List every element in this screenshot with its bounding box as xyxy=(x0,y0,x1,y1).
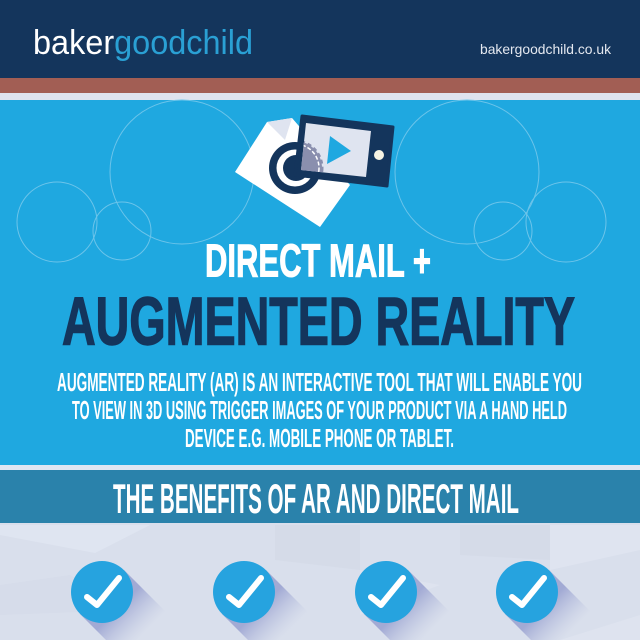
benefits panel xyxy=(0,523,640,640)
benefits band xyxy=(0,470,640,523)
heading line 1: DIRECT MAIL + xyxy=(205,234,431,286)
seal on screen xyxy=(301,141,324,172)
logo: bakergoodchild xyxy=(33,24,253,62)
header band xyxy=(0,0,640,78)
icon: check 2 xyxy=(213,561,316,640)
icon: check 3 xyxy=(355,561,458,640)
brown stripe xyxy=(0,78,640,93)
white divider xyxy=(0,465,640,470)
play triangle xyxy=(327,136,351,164)
icon: check 1 xyxy=(71,561,174,640)
icon: phone xyxy=(295,116,393,186)
website url: bakergoodchild.co.uk xyxy=(480,41,612,57)
background: blue panel xyxy=(0,100,640,466)
description text xyxy=(57,367,582,453)
light stripe xyxy=(0,93,640,100)
phone screen xyxy=(301,123,371,177)
phone button xyxy=(374,150,384,160)
icon: envelope xyxy=(235,118,350,227)
icon: check 4 xyxy=(496,561,599,640)
icon: envelope with phone and AR trigger xyxy=(235,116,393,227)
decorative circles xyxy=(17,100,606,262)
icon: target ring xyxy=(269,142,321,194)
